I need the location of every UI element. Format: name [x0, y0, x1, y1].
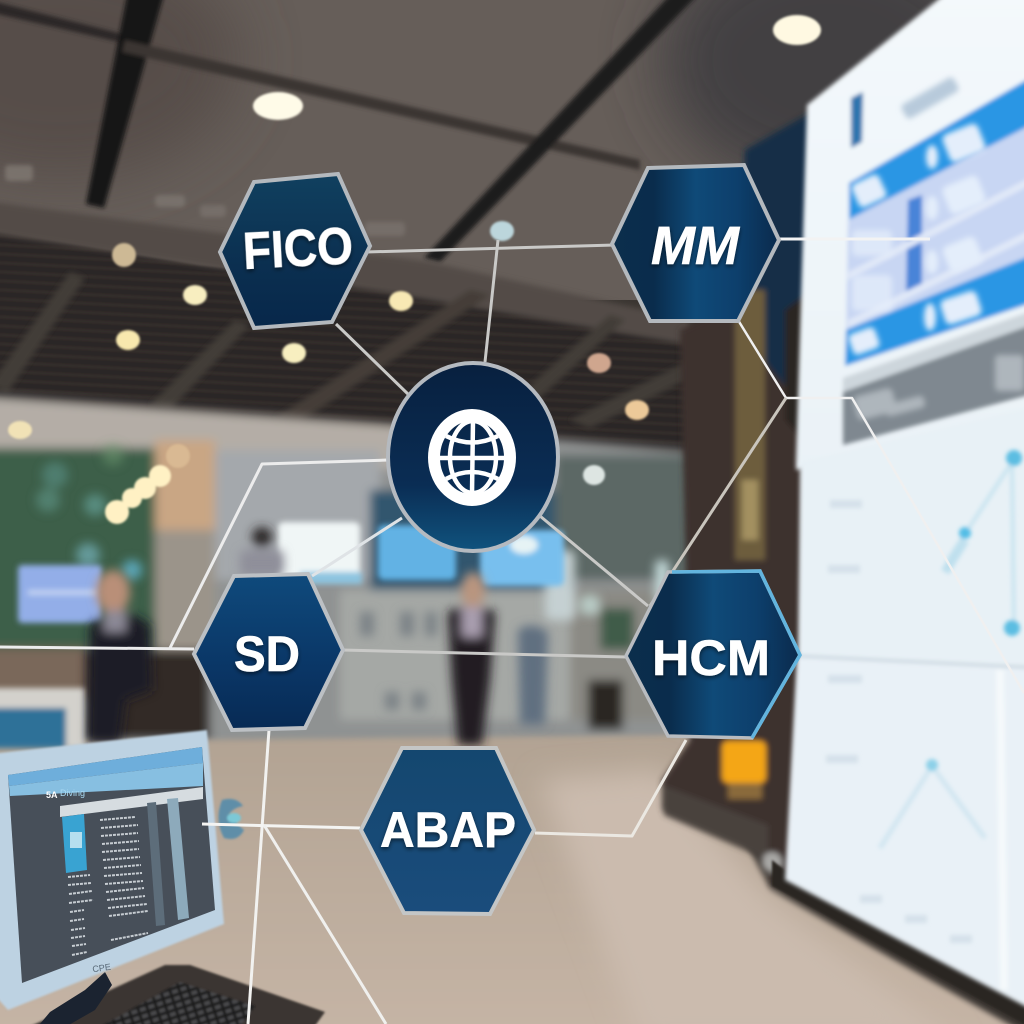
people [88, 527, 548, 745]
hexagon: FICO [220, 174, 370, 328]
glowing blue screens [0, 522, 564, 748]
hexagon: ABAP: ABAP [380, 802, 516, 858]
hexagon: SD [194, 574, 343, 730]
desktop monitor [0, 730, 325, 1024]
upper screen panel [796, 0, 1024, 470]
monitor stand [35, 972, 112, 1024]
keyboard [22, 965, 325, 1024]
lobby shelf pattern and bokeh [36, 444, 669, 710]
network connector lines [0, 239, 1024, 1024]
lower screen panels [785, 405, 1024, 1014]
small glass object [218, 799, 244, 839]
pillar near the wall screen [662, 112, 812, 885]
monitor screen: Diving [60, 788, 85, 798]
grey status bar [843, 308, 1024, 445]
hexagon: HCM [626, 571, 800, 738]
ceiling lights [8, 15, 821, 524]
hexagon: MM: MM [651, 216, 740, 276]
hexagon: HCM: HCM [652, 630, 770, 686]
faint screen labels [826, 500, 972, 943]
hub: globe [388, 363, 558, 551]
screen line charts [880, 450, 1022, 848]
hexagon: FICO: FICO [242, 217, 354, 281]
monitor screen: 5A [46, 790, 58, 800]
wall display screen [772, 0, 1024, 1024]
monitor screen [8, 747, 215, 983]
blurred screen text [847, 76, 987, 356]
hexagon: MM [612, 165, 779, 321]
monitor frame [0, 730, 224, 1010]
hexagon: SD: SD [234, 626, 300, 682]
ceiling panels [0, 0, 1024, 300]
monitor brand label: CPE [92, 962, 111, 974]
floor [0, 735, 1024, 1024]
hexagon: ABAP [361, 748, 534, 914]
icon: globe [434, 415, 510, 500]
back wall and lobby [0, 395, 700, 750]
slatted dark ceiling [0, 228, 690, 465]
